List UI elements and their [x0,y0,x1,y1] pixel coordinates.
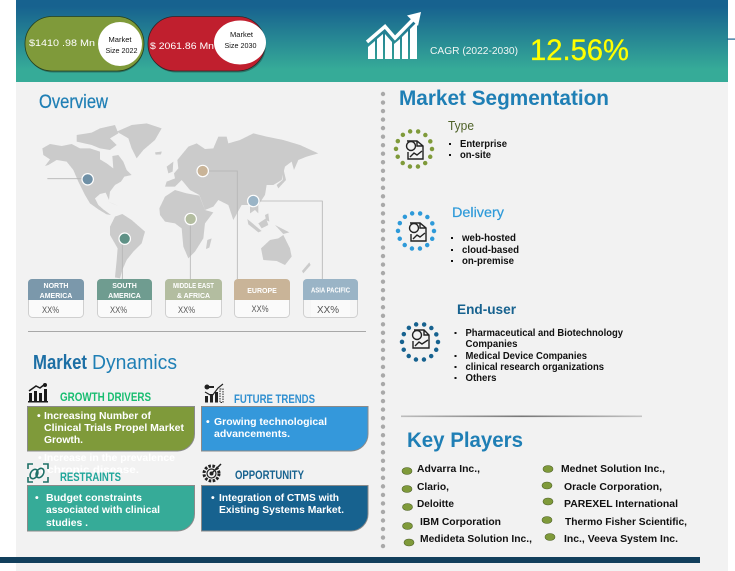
region card: south america: AMERICA [108,293,141,300]
overflowing hidden driver text: of chronic disease. [33,464,139,476]
header band [16,0,735,82]
heading: market dynamics [33,352,177,374]
key players list: left column [402,464,532,546]
heading: market segmentation: Market Segmentation [399,87,609,110]
segment: type [396,119,507,167]
region card: north america [28,279,84,318]
overflowing hidden driver text: Increase in the prevalence [44,452,175,464]
overflowing hidden driver text [33,452,175,476]
map marker: north america [82,174,93,185]
card: opportunity: Integration of CTMS with [219,492,339,504]
card: restraints: studies . [46,517,88,529]
segment: type: Enterprise [460,139,507,150]
key players list: right column: PAREXEL International [564,499,678,510]
card: growth drivers: • [37,410,41,422]
region card: north america: AMERICA [40,293,72,300]
market size 2022 pill: Market [108,35,132,44]
region card: europe: XX% [252,304,268,314]
region card: middle east and africa: MIDDLE EAST [173,283,215,290]
region connector lines [47,171,322,279]
card: growth drivers [28,406,194,451]
heading: market dynamics: Market [33,352,87,374]
region card: asia pacific [303,279,358,318]
heading: market dynamics: Dynamics [92,352,177,374]
card: growth drivers: Clinical Trials Propel Market [44,422,184,434]
market size 2030 pill: Market [230,30,254,39]
CAGR label: CAGR (2022-2030) [430,45,518,57]
market size 2030 pill: Size 2030 [224,41,256,50]
region card: south america: SOUTH [112,283,137,290]
segment: end-user: End-user [457,302,517,317]
segment: end-user: clinical research organizations [466,362,604,373]
card: growth drivers: Growth. [44,434,83,446]
card: opportunity: • [211,492,215,504]
icon: delivery [398,213,434,249]
segment: end-user: Others [466,373,497,384]
market size 2030 pill: $ 2061.86 Mn [150,41,214,52]
overflowing hidden driver text: • [38,452,42,464]
icon: restraints [28,464,48,482]
heading: key players: Key Players [407,429,523,452]
card: restraints [28,486,194,531]
footer bar [0,557,700,563]
key players list: left column: IBM Corporation [420,517,501,528]
segment: type: Type [448,119,474,133]
heading: opportunity: OPPORTUNITY [235,468,304,482]
segment: delivery: web-hosted [461,233,516,244]
map marker: asia pacific [248,195,259,207]
key players list: right column: Mednet Solution Inc., [561,464,665,475]
card: future trends: Growing technological [214,416,327,428]
region card: middle east and africa [165,279,222,318]
region card: asia pacific: ASIA PACIFIC [311,288,350,294]
region card: asia pacific: XX% [317,304,339,316]
key players list: left column: Advarra Inc., [417,464,480,475]
key players list: left column: Clario, [417,482,449,493]
segment: delivery: on-premise [462,256,514,267]
region card: middle east and africa: XX% [178,305,195,315]
heading: restraints: RESTRAINTS [60,470,121,484]
card: opportunity: Existing Systems Market. [219,504,344,516]
market size 2030 pill [148,16,266,72]
map: americas and greenland [42,123,162,278]
segment: end-user: Pharmaceutical and Biotechnology [466,328,623,339]
region card: north america: XX% [42,305,59,315]
card: restraints: Budget constraints [46,492,142,504]
card: growth drivers: Increasing Number of [44,410,151,422]
icon: future trends [204,384,223,402]
region card: middle east and africa: & AFRICA [177,293,210,300]
heading: growth drivers: GROWTH DRIVERS [60,390,151,404]
key players list: right column [542,464,687,545]
CAGR value: 12.56% [530,34,629,67]
region card: south america [97,279,152,318]
segment: delivery: cloud-based [462,245,519,256]
heading: overview: Overview [39,91,109,113]
icon: rising bar chart with arrow [367,12,421,59]
icon: opportunity [204,464,221,481]
map marker: middle east and africa [185,213,196,225]
heading: future trends: FUTURE TRENDS [234,392,315,406]
card: opportunity [202,486,368,531]
region card: europe [234,279,290,318]
key players list: right column: Oracle Corporation, [564,482,662,493]
segment: end-user: Companies [466,339,518,350]
market size 2022 pill [25,16,144,72]
segment: type: on-site [460,150,491,161]
icon: end-user [402,324,438,360]
key players list: left column: Medideta Solution Inc., [420,534,532,545]
card: restraints: • [35,492,39,504]
card: restraints: associated with clinical [46,504,160,516]
icon: growth drivers [28,383,48,402]
key players list: right column: Thermo Fisher Scientific, [565,517,687,528]
market size 2022 pill: $1410 .98 Mn [29,38,95,49]
map marker: europe [197,165,208,177]
map: europe, asia, africa and oceania [155,133,318,273]
world map [42,123,322,279]
key players list: left column: Deloitte [417,499,454,510]
region card: europe: EUROPE [247,288,277,295]
region card: north america: NORTH [44,283,68,290]
map marker: south america [119,233,130,244]
segment: delivery [398,204,519,267]
region card: south america: XX% [110,305,127,315]
key players list: right column: Inc., Veeva System Inc. [564,534,678,545]
card: future trends: advancements. [214,428,290,440]
segment: end-user: Medical Device Companies [466,351,587,362]
market size 2022 pill: Size 2022 [106,46,138,55]
card: future trends [202,406,368,451]
icon: type [396,131,432,167]
segment: end-user [402,302,623,384]
segment: delivery: Delivery [452,204,504,220]
card: future trends: • [206,416,210,428]
